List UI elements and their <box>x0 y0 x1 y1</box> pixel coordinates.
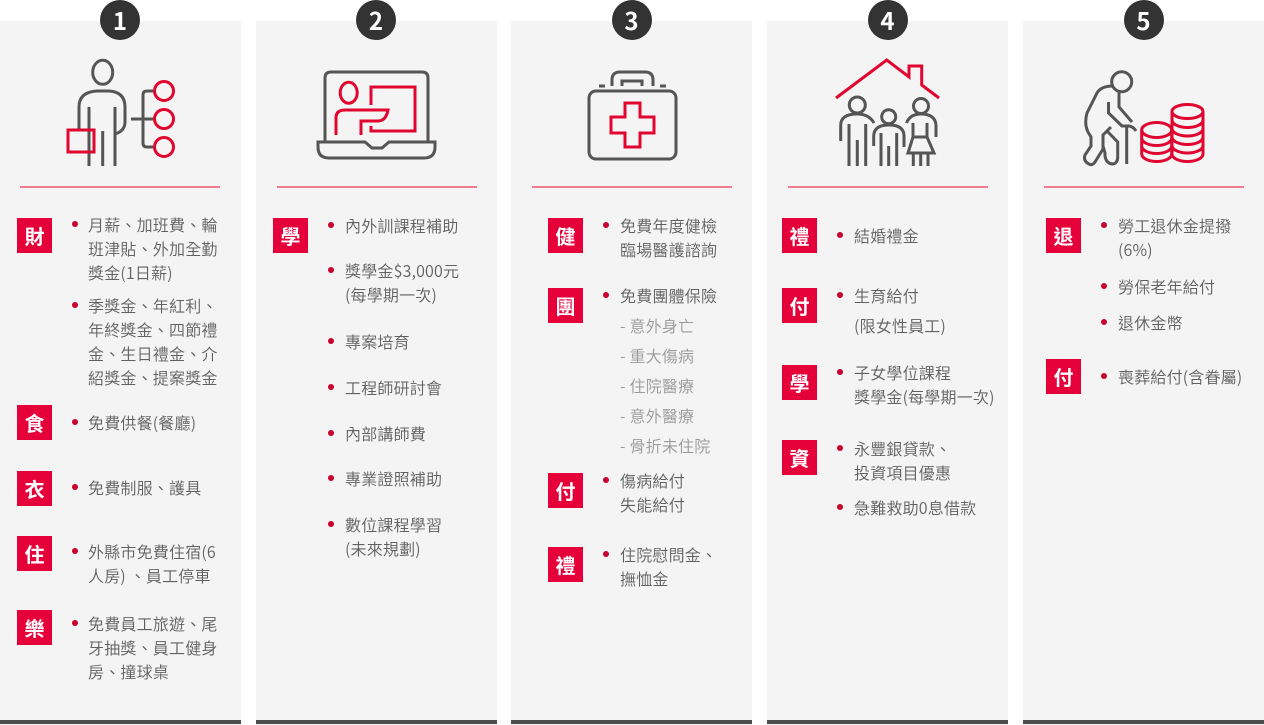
list: 數位課程學習 <box>328 512 442 560</box>
list: 財 item 2 <box>72 293 218 389</box>
badge: 退 <box>1046 218 1081 253</box>
sub-item: 骨折未住院: - 骨折未住院 <box>620 433 710 457</box>
badge: 付 <box>782 288 817 323</box>
badge: 資: 資 <box>790 443 810 472</box>
list: 專業證照補助: 專業證照補助 <box>345 466 442 490</box>
number badge 1 <box>100 0 140 40</box>
badge: 住: 住 <box>24 539 44 568</box>
list: 付 <box>603 468 685 516</box>
number badge 2: 2 <box>369 2 383 37</box>
list: 財 item 1: 獎金(1日薪) <box>88 260 173 284</box>
list: 永豐銀貸款 <box>837 436 951 484</box>
list: 數位課程學習: (未來規劃) <box>345 536 421 560</box>
list: 樂: 房、撞球桌 <box>88 659 169 683</box>
sub-item: 住院醫療: - 住院醫療 <box>620 373 694 397</box>
list: 禮: 住院慰問金、 <box>620 542 717 566</box>
number badge 3 <box>612 0 652 40</box>
badge: 學 <box>273 218 308 253</box>
badge: 團: 團 <box>556 291 576 320</box>
list: 永豐銀貸款: 永豐銀貸款、 <box>854 436 951 460</box>
list: 專案培育: 專案培育 <box>345 329 410 353</box>
sub-item: 意外醫療: - 意外醫療 <box>620 403 694 427</box>
icon: first aid kit <box>588 70 678 160</box>
list: 財 item 2: 金、生日禮金、介 <box>88 341 218 365</box>
list: 財 item 1 <box>72 212 218 284</box>
list: 生育給付: 生育給付 <box>854 283 919 307</box>
list: 結婚禮金: 結婚禮金 <box>854 223 919 247</box>
icon: employee with org chart <box>66 58 175 166</box>
list: 生育給付: (限女性員工) <box>854 313 946 337</box>
number badge 5 <box>1124 0 1164 40</box>
list: 樂: 牙抽獎、員工健身 <box>88 635 218 659</box>
list: 住 <box>72 539 216 587</box>
number badge 2 <box>356 0 396 40</box>
list: 財 item 2: 季獎金、年紅利、 <box>88 293 218 317</box>
list: 勞工退休金提撥 <box>1101 213 1231 261</box>
badge: 住 <box>17 536 52 571</box>
list: 獎學金: (每學期一次) <box>345 282 437 306</box>
list: 健 <box>603 213 717 261</box>
badge: 財 <box>17 218 52 253</box>
list: 內外訓課程補助: 內外訓課程補助 <box>345 213 458 237</box>
list: 內部講師費: 內部講師費 <box>345 421 426 445</box>
list: 財 item 2: 紹獎金、提案獎金 <box>88 365 218 389</box>
badge: 付: 付 <box>1054 362 1074 391</box>
list: 住: 人房) 、員工停車 <box>88 563 211 587</box>
badge: 付: 付 <box>556 476 576 505</box>
badge: 食: 食 <box>24 408 44 437</box>
badge: 禮 <box>548 547 583 582</box>
icon: family under roof <box>835 58 940 166</box>
list: 健: 臨場醫護諮詢 <box>620 237 717 261</box>
badge: 學: 學 <box>280 221 300 250</box>
number badge 3: 3 <box>624 2 639 37</box>
list: 勞工退休金提撥: 勞工退休金提撥 <box>1118 213 1231 237</box>
panel 5: retirement benefits <box>1023 21 1264 725</box>
list: 獎學金 <box>328 258 459 306</box>
badge: 退: 退 <box>1054 221 1074 250</box>
badge: 衣: 衣 <box>24 474 44 503</box>
badge: 食 <box>17 405 52 440</box>
number badge 4: 4 <box>880 2 895 37</box>
number badge 5: 5 <box>1136 2 1151 37</box>
badge: 財: 財 <box>24 221 44 250</box>
list: 生育給付 <box>837 283 946 337</box>
badge: 付: 付 <box>790 291 810 320</box>
list: 付: 失能給付 <box>620 492 685 516</box>
list: 禮: 撫恤金 <box>620 566 669 590</box>
list: 工程師研討會: 工程師研討會 <box>345 375 442 399</box>
badge: 健 <box>548 218 583 253</box>
list: 禮 <box>603 542 717 590</box>
list: 急難救助: 急難救助0息借款 <box>854 495 976 519</box>
badge: 樂: 樂 <box>24 613 44 642</box>
list: 樂 <box>72 611 218 683</box>
panel 1: salary and daily benefits <box>0 21 241 725</box>
list: 衣: 免費制服、護具 <box>88 475 201 499</box>
badge: 禮: 禮 <box>556 550 576 579</box>
number badge 1: 1 <box>113 2 127 37</box>
list: 健: 免費年度健檢 <box>620 213 717 237</box>
badge: 團 <box>548 288 583 323</box>
badge: 衣 <box>17 471 52 506</box>
list: 永豐銀貸款: 投資項目優惠 <box>854 460 951 484</box>
list: 子女學位課程: 子女學位課程 <box>854 360 951 384</box>
badge: 禮: 禮 <box>790 221 810 250</box>
list: 食: 免費供餐(餐廳) <box>88 410 196 434</box>
list: 樂: 免費員工旅遊、尾 <box>88 611 218 635</box>
list: 獎學金: 獎學金$3,000元 <box>345 258 459 282</box>
list: 勞保老年給付: 勞保老年給付 <box>1118 274 1215 298</box>
panel 4: family benefits <box>767 21 1008 725</box>
badge: 資 <box>782 440 817 475</box>
list: 子女學位課程: 獎學金(每學期一次) <box>854 384 995 408</box>
badge: 付 <box>548 473 583 508</box>
badge: 樂 <box>17 610 52 645</box>
badge: 健: 健 <box>556 221 576 250</box>
list: 付: 傷病給付 <box>620 468 685 492</box>
list: 勞工退休金提撥: (6%) <box>1118 237 1153 261</box>
list: 財 item 2: 年終獎金、四節禮 <box>88 317 218 341</box>
list: 財 item 1: 班津貼、外加全勤 <box>88 236 218 260</box>
list: 子女學位課程 <box>837 360 995 408</box>
list: 喪葬給付: 喪葬給付(含眷屬) <box>1118 364 1242 388</box>
list: 退休金幣: 退休金幣 <box>1118 310 1183 334</box>
badge: 付 <box>1046 359 1081 394</box>
icon: laptop with instructor <box>316 70 436 160</box>
number badge 4 <box>868 0 908 40</box>
sub-item: 重大傷病: - 重大傷病 <box>620 343 694 367</box>
list: 住: 外縣市免費住宿(6 <box>88 539 216 563</box>
badge: 學: 學 <box>790 368 810 397</box>
badge: 禮 <box>782 218 817 253</box>
panel 3: health benefits <box>511 21 752 725</box>
panel 2: learning benefits <box>256 21 497 725</box>
sub-item: 意外身亡: - 意外身亡 <box>620 313 694 337</box>
list: 數位課程學習: 數位課程學習 <box>345 512 442 536</box>
icon: elderly person with coins <box>1083 70 1204 166</box>
list: 團: 免費團體保險 <box>620 283 717 307</box>
badge: 學 <box>782 365 817 400</box>
list: 財 item 1: 月薪、加班費、輪 <box>88 212 218 236</box>
